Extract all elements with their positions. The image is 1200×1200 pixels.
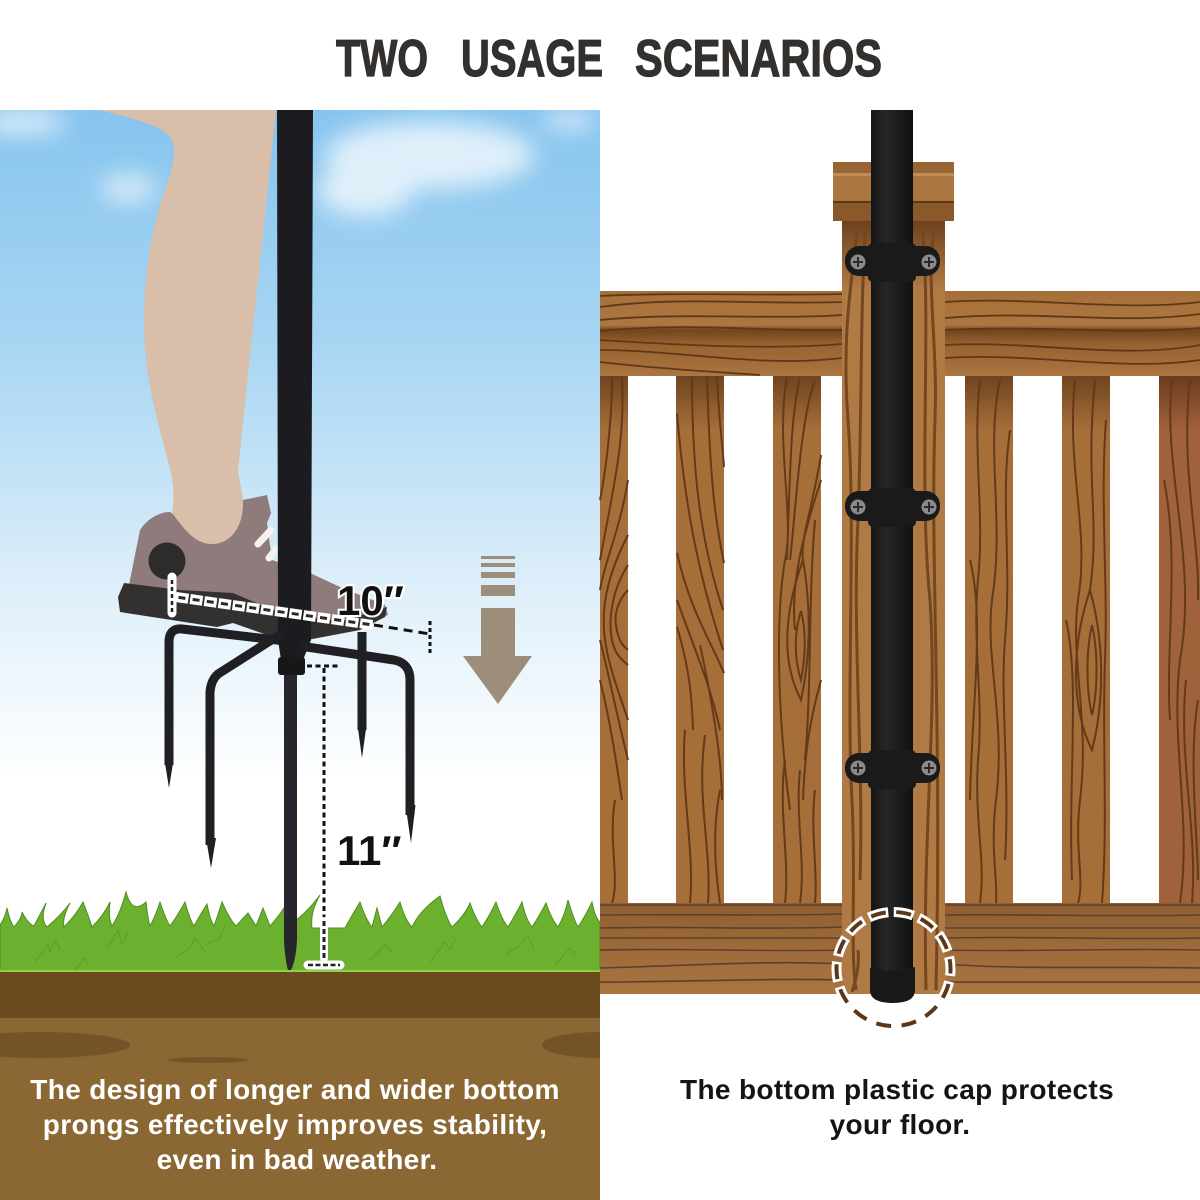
caption: left: even in bad weather. <box>157 1144 437 1175</box>
caption: left: prongs effectively improves stability, <box>43 1109 547 1140</box>
icon: downward arrow <box>463 556 532 704</box>
dimension: 10 inch <box>172 577 430 654</box>
bottom rail <box>600 903 1200 994</box>
top rail <box>600 291 1200 376</box>
title: TWO <box>336 30 428 88</box>
caption: right: your floor. <box>830 1109 970 1140</box>
post grain <box>846 225 938 992</box>
fork: pole and prongs <box>164 110 416 970</box>
pipe <box>870 110 915 1003</box>
soil <box>0 972 658 1200</box>
panel: right scenario, pipe clamped to a wooden fence <box>600 110 1200 1140</box>
title: SCENARIOS <box>635 30 882 88</box>
post <box>842 221 945 994</box>
dashed highlight circle <box>836 912 950 1026</box>
wood grain on pickets <box>600 377 1198 903</box>
sky background <box>0 110 600 734</box>
clouds <box>0 110 598 216</box>
title <box>336 30 882 88</box>
leg <box>100 110 276 544</box>
shoe <box>118 495 388 640</box>
clamps <box>845 243 940 789</box>
clamp: top <box>845 243 940 282</box>
fence pickets <box>600 376 1200 906</box>
label: 11 inch: 11″ <box>337 827 402 874</box>
clamp: middle <box>845 488 940 527</box>
caption: right: The bottom plastic cap protects <box>680 1074 1114 1105</box>
panel: left scenario, foot pressing fork into the lawn <box>0 110 658 1200</box>
grass <box>0 892 600 972</box>
title: USAGE <box>461 30 603 88</box>
post cap <box>833 162 954 221</box>
grass tufts <box>35 925 575 970</box>
caption: left: The design of longer and wider bottom <box>30 1074 560 1105</box>
clamp: bottom <box>845 750 940 789</box>
dimension: 11 inch <box>307 666 341 965</box>
label: 10 inch: 10″ <box>337 577 404 624</box>
